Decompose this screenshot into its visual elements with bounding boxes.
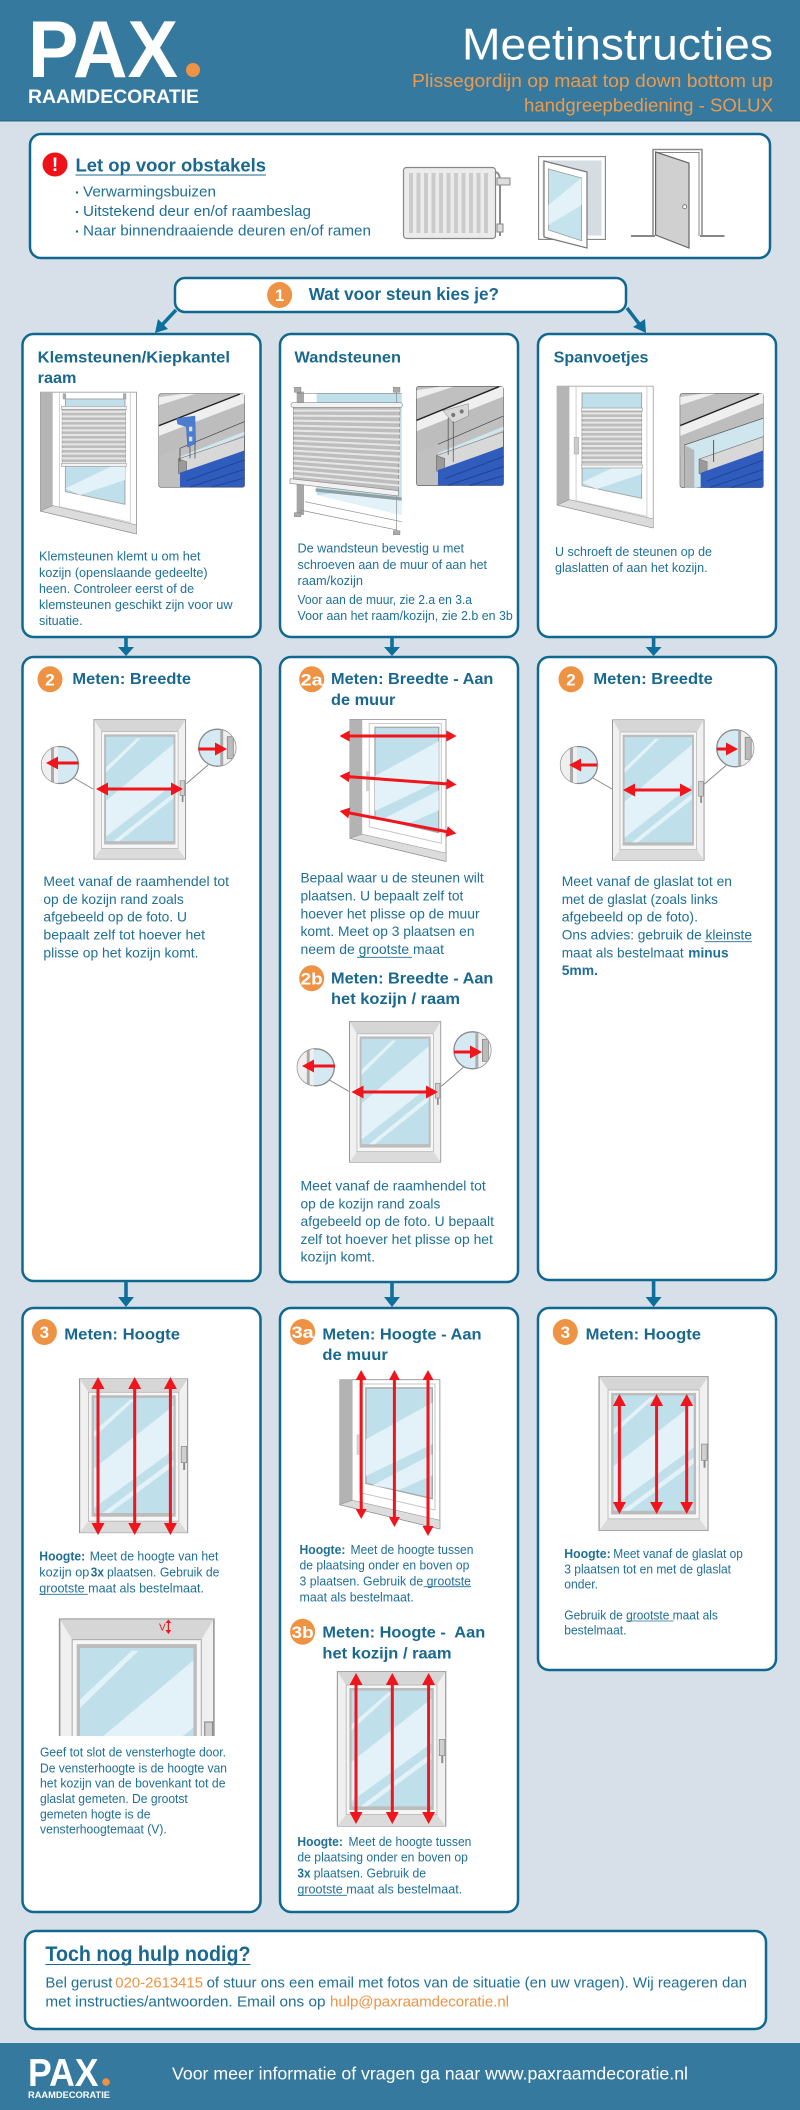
badge 3 rechts: 3 xyxy=(561,1323,570,1342)
heading: 3b xyxy=(322,1624,485,1662)
heading: hoogte rechts: Meten: Hoogte xyxy=(586,1326,701,1343)
illustration: detail klemsteun xyxy=(158,393,245,488)
text: glaslat breedte: 5mm. xyxy=(562,962,598,978)
illustration: breedte meten xyxy=(41,720,236,859)
text: hulp xyxy=(45,1975,747,2011)
heading: 2a: de muur xyxy=(331,692,395,709)
text: glaslat breedte xyxy=(562,873,752,978)
badge 3 rechts xyxy=(553,1319,578,1345)
text: wandsteunen: Voor aan de muur, zie 2.a en 3.a xyxy=(298,592,473,607)
text: vensterhoogte xyxy=(40,1745,227,1837)
illustration: vensterhoogte xyxy=(60,1619,214,1853)
badge 2: 2 xyxy=(45,670,55,690)
text: glaslat hoogte: bestelmaat. xyxy=(564,1623,626,1638)
heading: klemsteunen: Klemsteunen/Kiepkantel xyxy=(38,350,230,367)
obstakels list: Naar binnendraaiende deuren en/of ramen xyxy=(83,224,371,240)
panel: wandsteunen xyxy=(280,334,518,637)
header banner xyxy=(0,0,800,122)
text: glaslat hoogte xyxy=(564,1546,743,1638)
heading: klemsteunen xyxy=(38,350,230,387)
text: vensterhoogte: het kozijn van de bovenkant tot de xyxy=(40,1776,226,1791)
text: glaslat breedte: met de glaslat (zoals links xyxy=(562,891,718,907)
heading: 3a: de muur xyxy=(322,1347,388,1364)
text: breedte xyxy=(43,873,229,960)
panel: spanvoetjes xyxy=(538,334,776,637)
arrow: naar klemsteunen xyxy=(155,310,176,333)
text: 3a: de plaatsing onder en boven op xyxy=(300,1557,469,1572)
heading: breedte: Meten: Breedte xyxy=(72,671,191,688)
arrow: stap 1 naar 2 midden xyxy=(384,637,400,656)
badge 3a: 3a xyxy=(292,1323,314,1342)
illustration: hoogte aan het kozijn xyxy=(337,1672,446,1826)
step 1 badge: 1 xyxy=(275,286,284,305)
text: glaslat hoogte: onder. xyxy=(564,1577,598,1592)
text: 3b: Meet de hoogte tussen xyxy=(348,1834,471,1849)
text: 2b: afgebeeld op de foto. U bepaalt xyxy=(300,1213,494,1229)
text: hoogte xyxy=(39,1549,219,1596)
arrow: stap 2 naar 3 rechts xyxy=(646,1280,662,1307)
text: 3a: 3 plaatsen. Gebruik de grootste xyxy=(300,1573,471,1588)
footer logo: RAAMDECORATIE xyxy=(28,2090,110,2101)
text: 3b: grootste maat als bestelmaat. xyxy=(297,1881,462,1896)
text: vensterhoogte: Geef tot slot de vensterhogte door. xyxy=(40,1745,226,1760)
illustration: glaslat hoogte xyxy=(599,1377,708,1530)
text: breedte: bepaalt zelf tot hoever het xyxy=(43,926,205,942)
text: hoogte: Hoogte: xyxy=(39,1549,85,1564)
icon: radiator xyxy=(404,168,510,238)
text: wandsteunen: De wandsteun bevestig u met xyxy=(298,541,464,556)
badge 2b: 2b xyxy=(301,970,323,988)
text: 2b: Meet vanaf de raamhendel tot xyxy=(300,1178,486,1194)
text: hoogte: plaatsen. Gebruik de xyxy=(107,1565,219,1580)
text: glaslat hoogte: Gebruik de grootste maat als xyxy=(564,1607,718,1622)
logo: PAX raamdecoratie: PAX xyxy=(28,5,178,95)
text: spanvoetjes xyxy=(555,544,712,575)
text: klemsteunen: Klemsteunen klemt u om het xyxy=(39,549,201,564)
text: hoogte: kozijn op xyxy=(39,1565,89,1580)
panel: obstakels xyxy=(30,134,770,258)
illustration: hoogte meten xyxy=(80,1379,188,1533)
text: 2a xyxy=(300,870,484,957)
illustration: glaslat breedte xyxy=(560,720,754,860)
text: breedte: Meet vanaf de raamhendel tot xyxy=(43,873,229,889)
illustration: hoogte aan de muur xyxy=(340,1375,440,1531)
arrow: stap 1 naar 2 links xyxy=(118,637,134,656)
illustration: plisse op de muur xyxy=(290,387,402,535)
text: 2b xyxy=(300,1178,494,1265)
heading: spanvoetjes: Spanvoetjes xyxy=(554,350,649,367)
badge 3 xyxy=(32,1319,57,1345)
text: 3a: Hoogte: xyxy=(300,1542,345,1557)
heading: hulp: Toch nog hulp nodig? xyxy=(45,1943,251,1966)
heading: 2b xyxy=(331,970,493,1008)
obstakels list: Uitstekend deur en/of raambeslag xyxy=(83,204,311,220)
text: glaslat hoogte: Hoogte: xyxy=(564,1546,611,1561)
heading: klemsteunen: raam xyxy=(38,370,76,387)
illustration: raam met klemsteun plisse xyxy=(40,392,137,534)
text: 3b: plaatsen. Gebruik de xyxy=(314,1865,426,1880)
text: wandsteunen xyxy=(298,541,513,623)
panel: meten breedte klem xyxy=(22,657,260,1281)
title: Meetinstructies xyxy=(462,20,773,70)
heading: obstakels: Let op voor obstakels xyxy=(76,154,266,176)
text: 2a: plaatsen. U bepaalt zelf tot xyxy=(300,888,463,904)
arrow: stap 2 naar 3 midden xyxy=(384,1282,400,1307)
text: breedte: afgebeeld op de foto. U xyxy=(43,909,187,925)
text: vensterhoogte: glaslat gemeten. De grootst xyxy=(40,1791,188,1806)
text: 3a: maat als bestelmaat. xyxy=(300,1589,414,1604)
text: vensterhoogte: De vensterhoogte is de hoogte van xyxy=(40,1760,227,1775)
illustration: detail spanvoetje xyxy=(680,393,764,488)
heading: 3a: Meten: Hoogte - Aan xyxy=(322,1326,482,1343)
text: klemsteunen: heen. Controleer eerst of de xyxy=(39,581,194,596)
arrow: stap 2 naar 3 links xyxy=(118,1281,134,1307)
text: 2a: neem de grootste maat xyxy=(300,941,444,957)
text: glaslat breedte: Meet vanaf de glaslat tot en xyxy=(562,873,732,889)
text: hulp: hulp@paxraamdecoratie.nl xyxy=(330,1995,509,2011)
text: glaslat hoogte: 3 plaatsen tot en met de glaslat xyxy=(564,1561,731,1576)
text: 2a: hoever het plisse op de muur xyxy=(300,905,480,921)
heading: 3b: het kozijn / raam xyxy=(322,1645,452,1662)
panel: meten breedte wand xyxy=(280,657,518,1282)
text: klemsteunen: klemsteunen geschikt zijn voor uw xyxy=(39,597,233,612)
step 1 badge xyxy=(267,282,292,308)
heading: 2b: Meten: Breedte - Aan xyxy=(331,970,493,987)
text: glaslat breedte: Ons advies: gebruik de kleinste xyxy=(562,926,752,942)
text: glaslat breedte: maat als bestelmaat xyxy=(562,944,684,960)
text: 2b: op de kozijn rand zoals xyxy=(300,1195,440,1211)
panel: hulp xyxy=(25,1931,766,2029)
text: glaslat hoogte: Meet vanaf de glaslat op xyxy=(613,1546,743,1561)
heading: 3a xyxy=(322,1326,482,1364)
text: 3a: Meet de hoogte tussen xyxy=(350,1542,474,1557)
text: 3b: 3x xyxy=(297,1865,311,1880)
subtitle: Plissegordijn op maat top down bottom up xyxy=(412,70,773,91)
badge 2 rechts: 2 xyxy=(566,670,576,690)
subtitle xyxy=(412,70,774,116)
logo: PAX raamdecoratie: RAAMDECORATIE xyxy=(28,86,199,108)
text: 3b: Hoogte: xyxy=(297,1834,343,1849)
arrow: stap 1 naar 2 rechts xyxy=(646,637,662,656)
heading: breedte rechts: Meten: Breedte xyxy=(593,671,713,688)
V maat xyxy=(159,1620,171,1634)
text: hoogte: grootste maat als bestelmaat. xyxy=(39,1581,204,1596)
badge 3b: 3b xyxy=(292,1623,314,1642)
text: breedte: op de kozijn rand zoals xyxy=(43,891,184,907)
badge 3a xyxy=(290,1319,315,1345)
obstakels list: Verwarmingsbuizen xyxy=(83,185,216,201)
illustration: raam met spanvoetjes xyxy=(556,386,654,528)
badge 2 rechts xyxy=(558,666,584,692)
text: klemsteunen xyxy=(39,549,233,628)
text: 3a xyxy=(300,1542,474,1604)
text: 2b: kozijn komt. xyxy=(300,1249,375,1265)
footer text: Voor meer informatie of vragen ga naar www.paxraamdecoratie.nl xyxy=(172,2063,688,2083)
badge 3b xyxy=(290,1619,315,1645)
text: klemsteunen: situatie. xyxy=(39,613,83,628)
arrow: naar spanvoetjes xyxy=(627,308,646,333)
badge 2 xyxy=(38,666,62,692)
text: breedte: plisse op het kozijn komt. xyxy=(43,944,199,960)
footer banner xyxy=(0,2043,800,2110)
text: klemsteunen: kozijn (openslaande gedeelte) xyxy=(39,565,208,580)
panel: meten hoogte span xyxy=(538,1308,776,1670)
text: vensterhoogte: gemeten hogte is de xyxy=(40,1806,150,1821)
heading: 2a: Meten: Breedte - Aan xyxy=(331,671,493,688)
V maat: V xyxy=(159,1622,166,1634)
text: 3b: de plaatsing onder en boven op xyxy=(297,1849,468,1864)
panel: meten hoogte wand xyxy=(280,1308,518,1912)
heading: 2a xyxy=(331,671,493,709)
text: wandsteunen: schroeven aan de muur of aan het xyxy=(298,557,487,572)
heading: hoogte: Meten: Hoogte xyxy=(64,1326,180,1343)
text: vensterhoogte: vensterhoogtemaat (V). xyxy=(40,1822,167,1837)
badge 2a: 2a xyxy=(301,670,323,690)
panel: meten hoogte klem xyxy=(22,1308,260,1912)
text: 2a: Bepaal waar u de steunen wilt xyxy=(300,870,484,886)
text: hulp: 020-2613415 xyxy=(115,1975,203,1991)
text: glaslat breedte: afgebeeld op de foto). xyxy=(562,909,698,925)
question text: Wat voor steun kies je? xyxy=(309,284,499,304)
icon: naar binnen draaiend raam xyxy=(538,156,606,248)
heading: 3b: Meten: Hoogte - Aan xyxy=(322,1624,485,1641)
illustration: breedte aan het kozijn xyxy=(297,1022,491,1162)
text: glaslat breedte: minus xyxy=(688,944,729,960)
obstakels list xyxy=(76,185,371,240)
heading: wandsteunen: Wandsteunen xyxy=(294,350,401,367)
text: hulp: Bel gerust xyxy=(45,1975,112,1991)
illustration: breedte aan de muur xyxy=(344,719,452,861)
text: spanvoetjes: U schroeft de steunen op de xyxy=(555,544,712,559)
illustration: detail wandsteun xyxy=(416,386,504,486)
text: spanvoetjes: glaslatten of aan het kozijn. xyxy=(555,560,708,575)
question box xyxy=(175,278,626,312)
footer logo: PAX xyxy=(28,2052,98,2095)
text: wandsteunen: Voor aan het raam/kozijn, zie 2.b en 3b xyxy=(298,608,513,623)
panel: meten breedte span xyxy=(538,657,776,1280)
text: hoogte: Meet de hoogte van het xyxy=(90,1549,219,1564)
icon: deur xyxy=(631,150,724,248)
text: 3b xyxy=(297,1834,471,1896)
text: 2b: zelf tot hoever het plisse op het xyxy=(300,1231,493,1247)
text: hoogte: 3x xyxy=(91,1565,105,1580)
subtitle: handgreepbediening - SOLUX xyxy=(524,95,774,116)
heading: 2b: het kozijn / raam xyxy=(331,991,460,1008)
badge 2b xyxy=(299,965,324,991)
text: wandsteunen: raam/kozijn xyxy=(298,573,363,588)
text: hulp: met instructies/antwoorden. Email ons op xyxy=(45,1995,326,2011)
badge 3: 3 xyxy=(40,1323,49,1342)
badge 2a xyxy=(299,666,324,692)
panel: klemsteunen xyxy=(22,334,260,637)
text: hulp: of stuur ons een email met fotos van de situatie (en uw vragen). Wij reageren dan xyxy=(207,1975,747,1991)
icon: warning: ! xyxy=(52,155,58,176)
icon: warning xyxy=(42,152,68,176)
text: 2a: komt. Meet op 3 plaatsen en xyxy=(300,923,474,939)
